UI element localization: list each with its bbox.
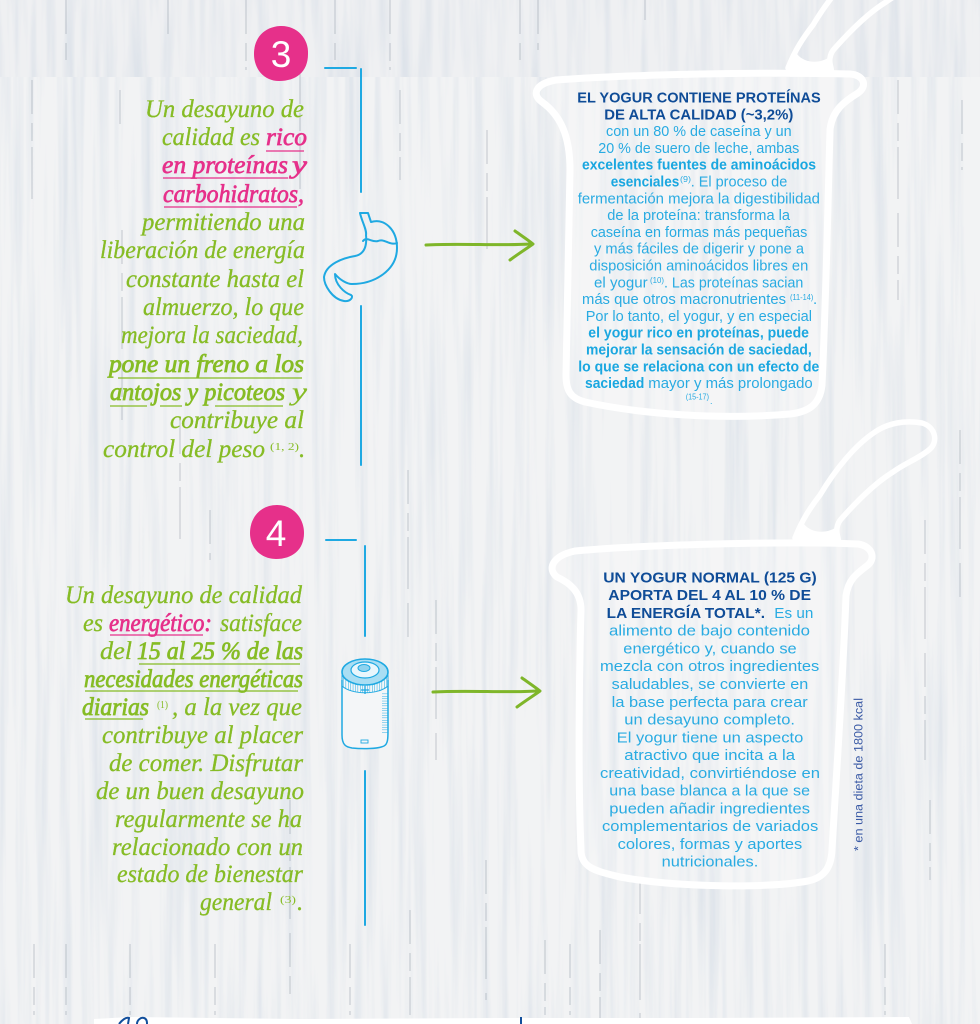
panel 1 text: .	[710, 396, 713, 406]
panel 2 text: APORTA DEL 4 AL 10 % DE	[608, 587, 811, 604]
section 3 handwritten text: y	[288, 152, 308, 179]
section 3 handwritten text: liberación de energía	[100, 237, 305, 264]
section 4 blue connector line	[326, 540, 365, 925]
section 3 handwritten text: permitiendo una	[140, 209, 305, 236]
panel 1 text: Por lo tanto, el yogur, y en especial	[586, 308, 812, 325]
section 3 handwritten text: control del peso	[103, 436, 265, 463]
panel 2 text: nutricionales.	[662, 854, 758, 871]
panel 1 text: y más fáciles de digerir y pone a	[594, 241, 805, 258]
section 3 handwritten text: contribuye al	[170, 407, 304, 434]
section 4 handwritten text: de comer. Disfrutar	[109, 750, 303, 777]
handle of cup 1	[783, 0, 928, 74]
panel 1 text: con un 80 % de caseína y un	[606, 123, 792, 140]
panel 1 text: (11-14)	[790, 293, 814, 302]
icon: battery	[342, 659, 388, 749]
section 3 handwritten text: (1, 2)	[270, 442, 299, 453]
panel 2 text: mezcla con otros ingredientes	[600, 658, 819, 675]
panel 1 text: (9)	[680, 175, 691, 184]
panel 2 text: UN YOGUR NORMAL (125 G)	[603, 569, 817, 586]
section 3 handwritten text: y	[288, 379, 308, 406]
section 3 handwritten text: rico	[266, 124, 307, 151]
section 4 handwritten text: diarias	[82, 694, 149, 721]
section 3 handwritten text: Un desayuno de	[145, 96, 304, 123]
section 4 handwritten text: satisface	[220, 610, 302, 637]
section 4 handwritten text: 15 al 25 % de las	[137, 638, 303, 665]
handle of cup 2	[790, 422, 935, 544]
arrow to yogurt panel 2	[433, 678, 540, 707]
panel 1 text: . Las proteínas sacian	[664, 274, 803, 291]
section 4 handwritten text: .	[297, 889, 303, 916]
section 3 handwritten text: almuerzo, lo que	[143, 294, 304, 321]
panel 2 text: creatividad, convirtiéndose en	[600, 765, 820, 782]
panel 1 text: el yogur rico en proteínas, puede	[588, 325, 809, 342]
panel 2 text: Es un	[774, 605, 813, 622]
section 4 handwritten text: necesidades energéticas	[84, 666, 303, 693]
section 3 handwritten text: carbohidratos,	[163, 181, 304, 208]
section 3 number badge	[254, 26, 308, 81]
panel 1 text: lo que se relaciona con un efecto de	[578, 358, 819, 375]
panel 1 text: EL YOGUR CONTIENE PROTEÍNAS	[577, 90, 821, 106]
panel 1 text: excelentes fuentes de aminoácidos	[582, 157, 816, 174]
panel 2 text: pueden añadir ingredientes	[609, 800, 810, 817]
section 4 handwritten text: regularmente se ha	[115, 806, 302, 833]
panel 1 text: (15-17)	[686, 392, 709, 402]
panel 2 text: saludables, se convierte en	[612, 676, 808, 693]
panel 2 text: colores, formas y aportes	[618, 836, 802, 853]
panel 2 text: energético y, cuando se	[623, 640, 797, 657]
panel 2 text: la base perfecta para crear	[612, 694, 808, 711]
section 3 handwritten text: calidad es	[162, 124, 260, 151]
section 4 handwritten text: del	[100, 638, 132, 665]
section 3 handwritten text: antojos y picoteos	[110, 379, 285, 406]
icon: stomach	[324, 213, 397, 301]
panel 2 text: complementarios de variados	[602, 818, 818, 835]
section 4 handwritten text: de un buen desayuno	[96, 778, 304, 805]
panel 1 text: 20 % de suero de leche, ambas	[598, 140, 799, 157]
yogurt cup panel 1	[536, 0, 928, 416]
panel 2 text: El yogur tiene un aspecto	[617, 729, 803, 746]
panel 1 text	[577, 90, 821, 406]
section 4 handwritten text: contribuye al placer	[102, 722, 303, 749]
panel 1 text: de la proteína: transforma la	[607, 207, 791, 224]
panel 2 text: atractivo que incita a la	[624, 747, 796, 764]
section 3 number badge: 3	[271, 34, 291, 75]
bottom white strip with cropped heading	[94, 1017, 912, 1024]
section 3 handwritten text: pone un freno a los	[107, 351, 304, 378]
section 4 handwritten text: (1)	[157, 700, 168, 711]
footnote: * en una dieta de 1800 kcal	[854, 698, 866, 851]
panel 1 text: DE ALTA CALIDAD (~3,2%)	[604, 106, 793, 123]
section 4 handwritten text: relacionado con un	[112, 834, 303, 861]
section 4 handwritten text: general	[200, 889, 272, 916]
section 4 handwritten text: (3)	[280, 895, 296, 906]
panel 1 text: .	[813, 291, 817, 308]
panel 2 text: un desayuno completo.	[624, 712, 795, 728]
section 4 handwritten text: Un desayuno de calidad	[65, 582, 302, 609]
panel 2 text: alimento de bajo contenido	[609, 623, 810, 640]
panel 1 text: esenciales	[611, 174, 679, 190]
panel 2 text: una base blanca a la que se	[609, 783, 810, 800]
yogurt cup panel 2	[552, 422, 935, 886]
panel 1 text: el yogur	[594, 274, 648, 291]
panel 1 text: mejorar la sensación de saciedad,	[586, 342, 812, 358]
section 3 blue connector line	[325, 68, 361, 465]
panel 1 text: (10)	[650, 276, 664, 285]
section 4 handwritten text: estado de bienestar	[117, 861, 303, 888]
arrow to yogurt panel 1	[426, 231, 533, 260]
section 3 handwritten text: mejora la saciedad,	[121, 322, 303, 349]
section 4 number badge	[250, 505, 304, 559]
panel 1 text: mayor y más prolongado	[648, 375, 813, 392]
section 4 handwritten text: es	[83, 610, 103, 637]
panel 1 text: fermentación mejora la digestibilidad	[578, 190, 820, 207]
section 3 handwritten text: constante hasta el	[126, 266, 304, 293]
panel 2 text: LA ENERGÍA TOTAL*.	[607, 605, 765, 622]
panel 1 text: caseína en formas más pequeñas	[591, 224, 807, 241]
section 3 handwritten text	[100, 96, 308, 463]
panel 2 text	[600, 569, 820, 871]
section 4 number badge: 4	[266, 513, 286, 554]
panel 1 text: más que otros macronutrientes	[582, 291, 786, 308]
panel 1 text: . El proceso de	[691, 174, 787, 190]
panel 1 text: saciedad	[585, 375, 644, 392]
section 3 handwritten text: en proteínas	[162, 152, 288, 179]
section 4 handwritten text	[65, 582, 304, 916]
section 4 handwritten text: , a la vez que	[172, 694, 302, 721]
panel 1 text: disposición aminoácidos libres en	[589, 258, 808, 274]
section 4 handwritten text: energético:	[109, 610, 212, 637]
section 3 handwritten text: .	[299, 436, 305, 463]
